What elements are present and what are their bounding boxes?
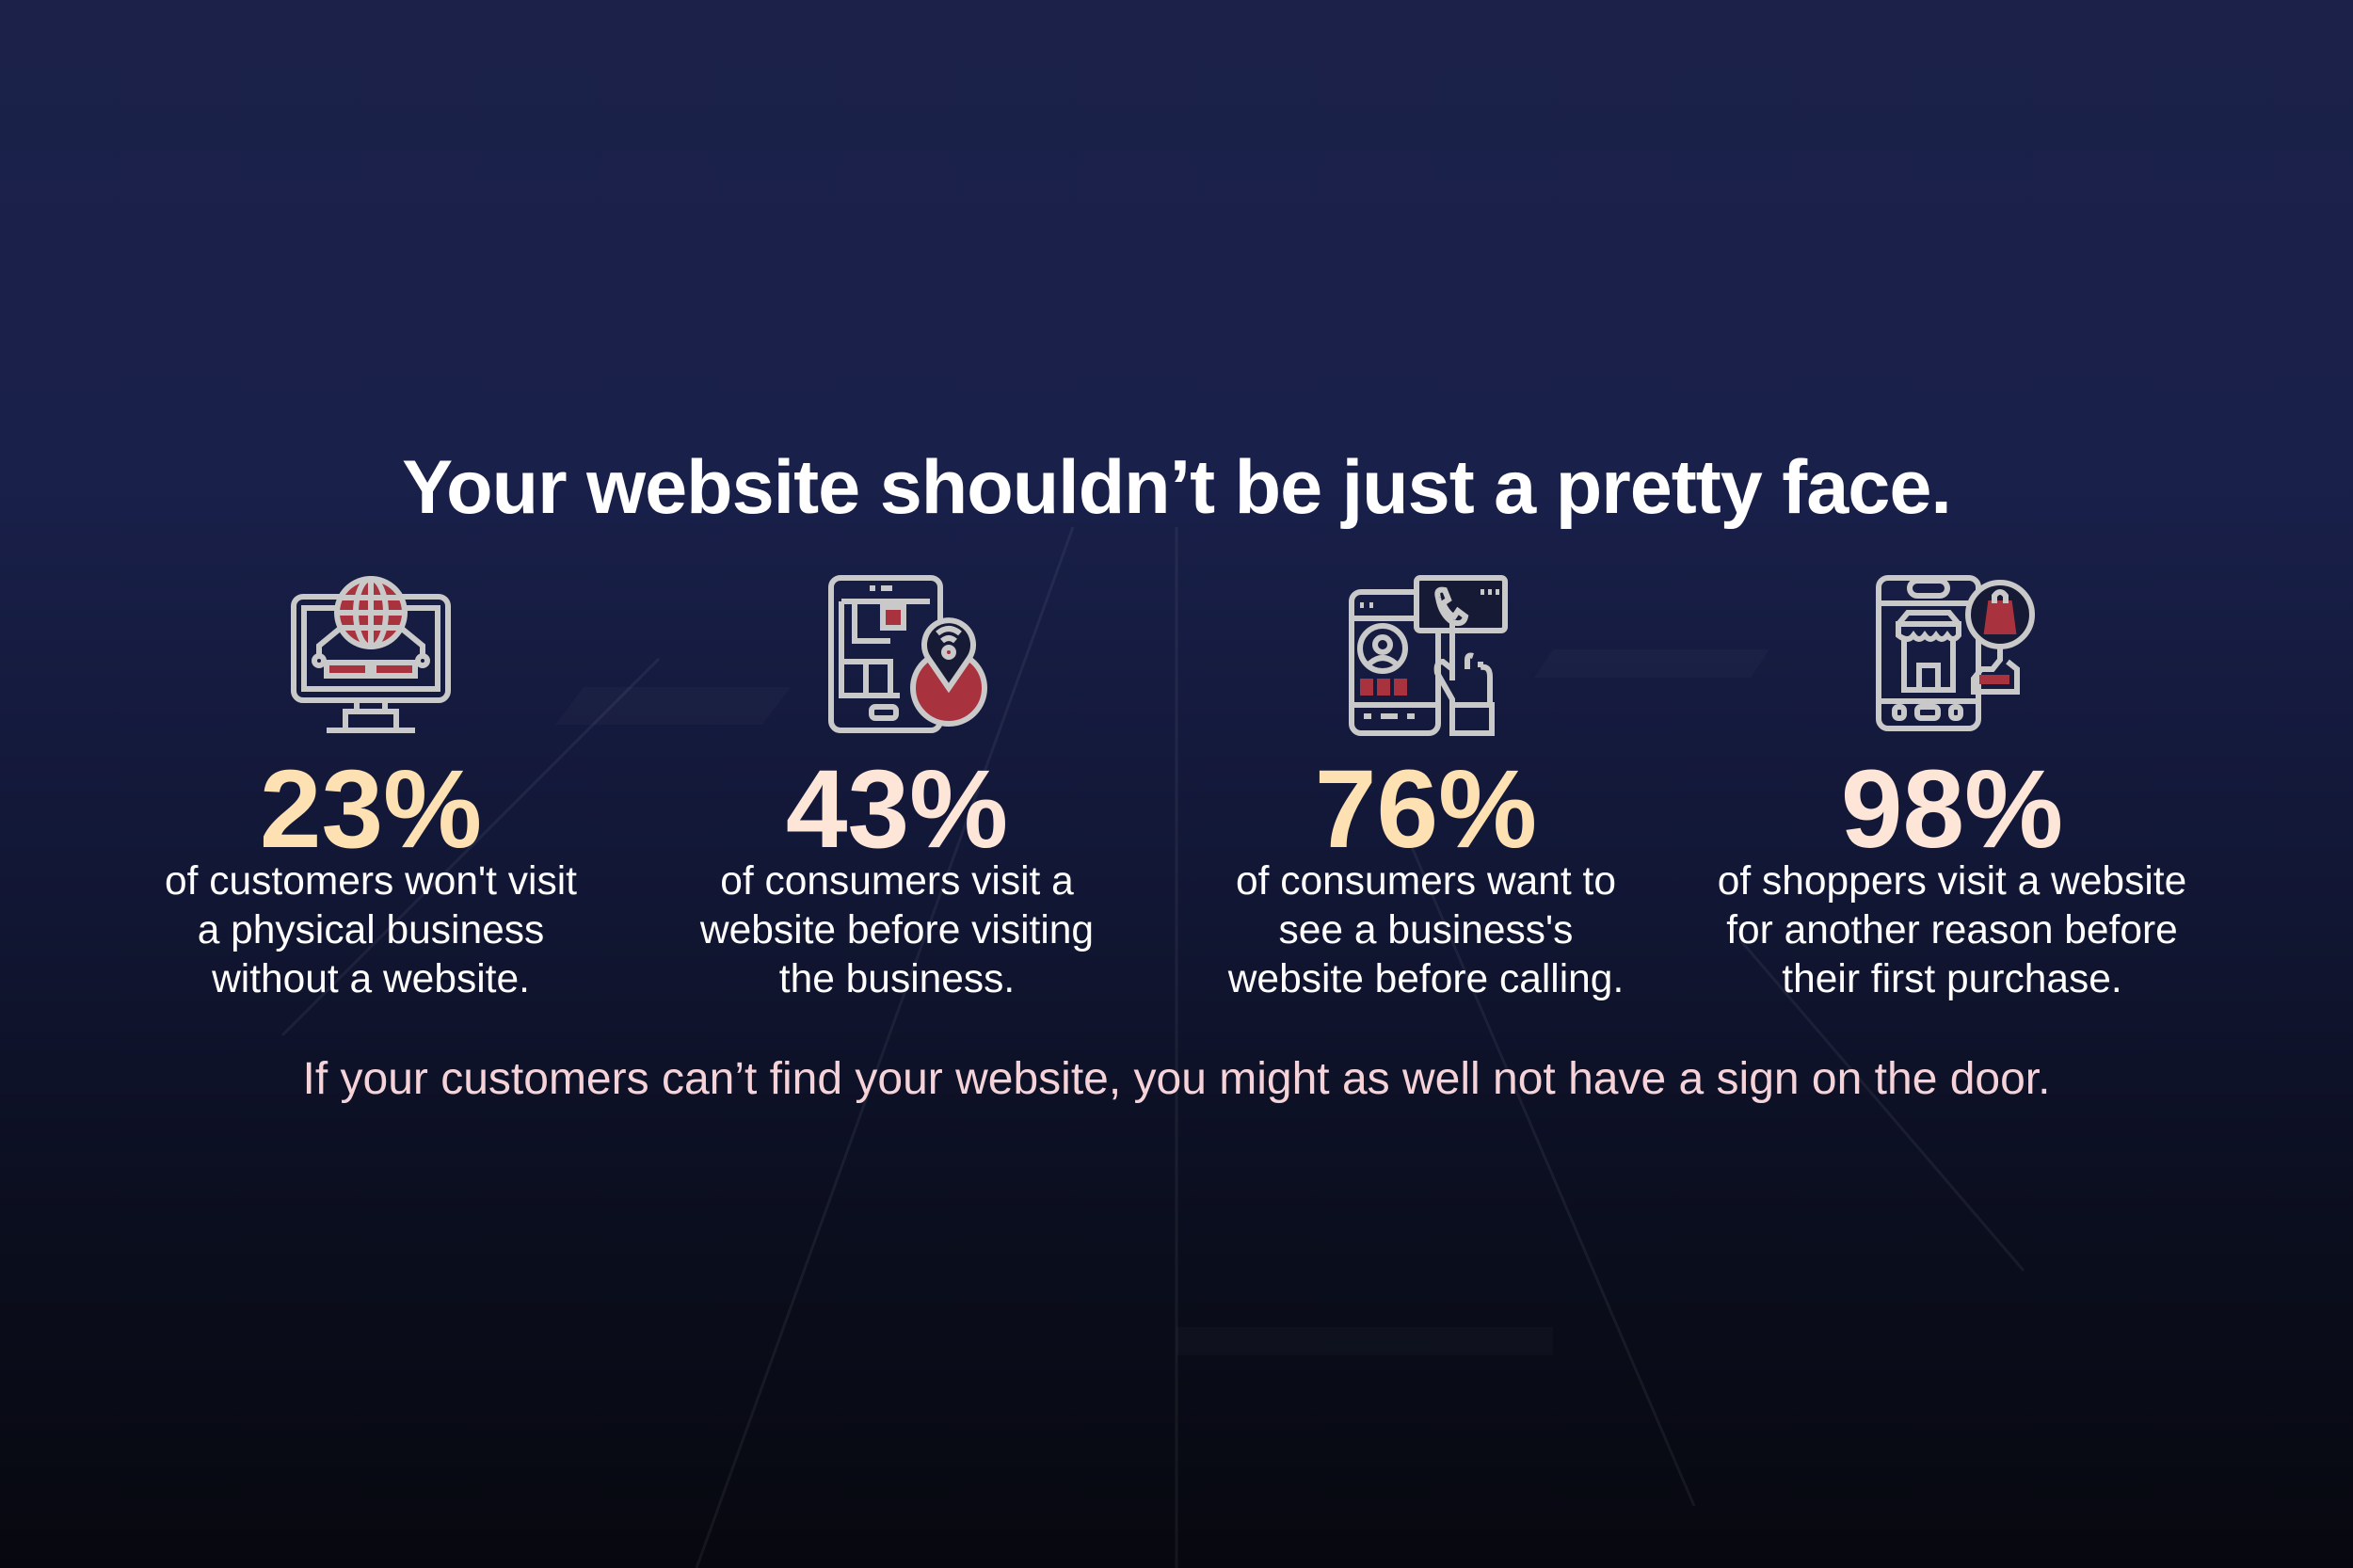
stat: 43%: the business. — [779, 957, 1015, 1001]
icon: phone with map pin — [828, 575, 987, 733]
stat: 76%: of consumers want to — [1236, 859, 1616, 904]
stat: 76%: 76% — [1315, 747, 1537, 872]
stat: 76%: website before calling. — [1228, 957, 1624, 1001]
stat: 98%: for another reason before — [1726, 908, 2178, 952]
stat: 43%: 43% — [786, 747, 1008, 872]
stat: 98% — [1718, 747, 2186, 1001]
stat: 23%: of customers won't visit — [165, 859, 577, 904]
stat: 98%: their first purchase. — [1782, 957, 2122, 1001]
stat: 98%: 98% — [1841, 747, 2063, 872]
stat: 23%: without a website. — [212, 957, 530, 1001]
icon: phone call with hand — [1349, 575, 1508, 736]
stat: 23%: 23% — [260, 747, 482, 872]
footer tagline: If your customers can’t find your website, you might as well not have a sign on the door. — [303, 1054, 2050, 1104]
stat: 76% — [1227, 747, 1624, 1001]
stat: 98%: of shoppers visit a website — [1718, 859, 2186, 904]
stat: 43%: website before visiting — [700, 908, 1094, 952]
title: Your website shouldn’t be just a pretty face. — [402, 445, 1951, 530]
stat: 23% — [165, 747, 577, 1001]
icon: monitor with globe — [291, 576, 451, 733]
stat: 76%: see a business's — [1279, 908, 1573, 952]
stat: 43% — [700, 747, 1094, 1001]
stat: 23%: a physical business — [198, 908, 544, 952]
stat: 43%: of consumers visit a — [720, 859, 1074, 904]
icon: phone store with bag — [1876, 575, 2035, 731]
